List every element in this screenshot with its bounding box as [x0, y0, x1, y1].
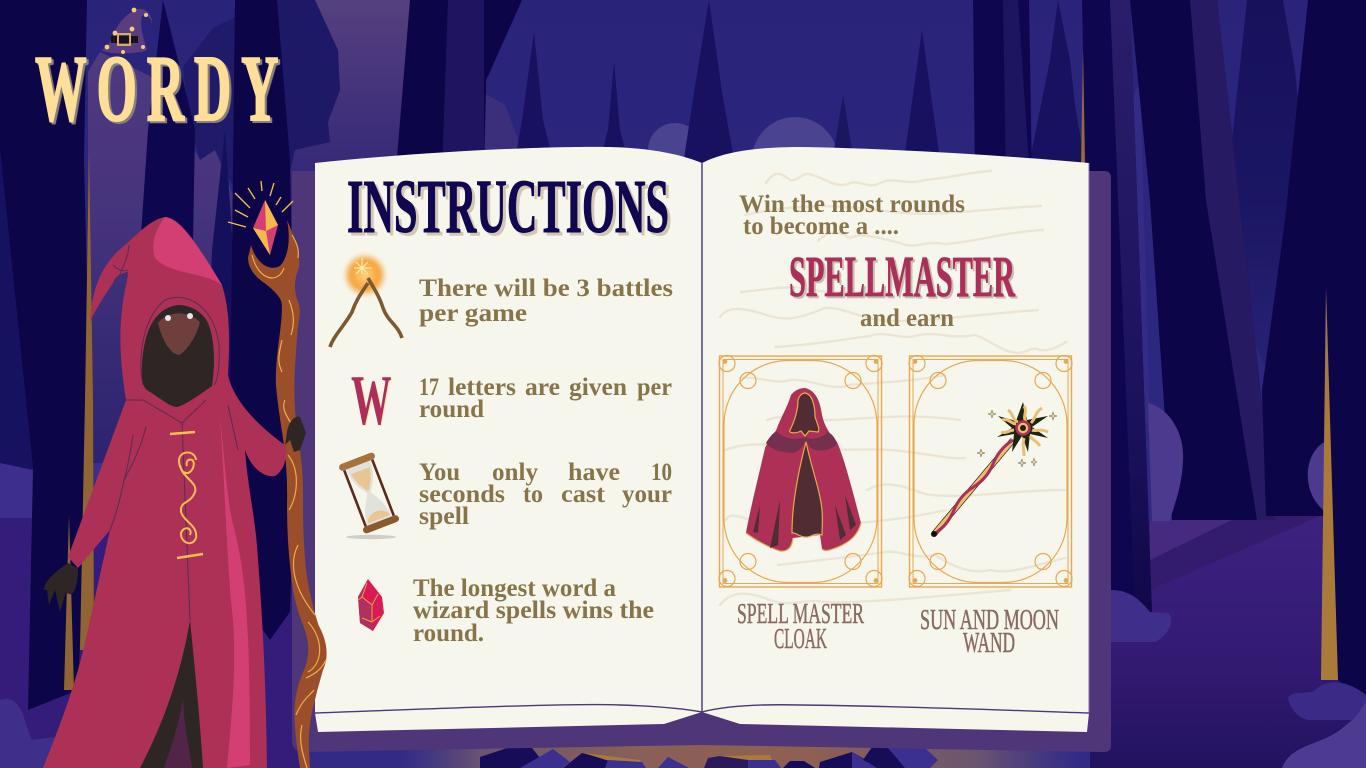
- text: wizard spells wins the: [413, 597, 654, 624]
- text: to: [523, 481, 543, 508]
- text: given: [569, 374, 627, 401]
- gold swirl: [179, 452, 196, 543]
- gem with rays: [228, 181, 293, 255]
- icon: cloak: [746, 388, 861, 551]
- golden spikes: [1321, 287, 1338, 680]
- caption: WAND: [963, 628, 1015, 659]
- panel: instructions: [330, 165, 673, 647]
- wordmark: WORDY: [35, 37, 288, 141]
- heading: INSTRUCTIONS: [347, 165, 669, 249]
- robe seams: [110, 245, 238, 620]
- intro text: to become a ....: [743, 213, 899, 240]
- icon: red gem: [358, 579, 384, 631]
- book cover: [292, 171, 1111, 752]
- item 3: time: [338, 452, 672, 539]
- conifers: [515, 32, 553, 160]
- icon: wand: [931, 402, 1057, 537]
- gold clasps: [170, 432, 203, 558]
- text: spell: [419, 503, 469, 530]
- face opening: [142, 305, 214, 407]
- card: wand: [909, 356, 1072, 659]
- caption: SUN AND MOON: [920, 605, 1059, 636]
- icon: hourglass: [338, 452, 400, 534]
- intro text: Win the most rounds: [739, 191, 965, 218]
- text: letters: [448, 374, 516, 401]
- title: WORDY: [35, 8, 288, 141]
- text: are: [525, 374, 560, 401]
- text: seconds: [419, 481, 505, 508]
- caption: CLOAK: [774, 624, 827, 655]
- heading: spellmaster: SPELLMASTER: [789, 244, 1016, 309]
- robe highlights: [153, 217, 222, 285]
- text: round.: [413, 620, 484, 647]
- text: 17: [419, 374, 439, 401]
- item 2: letters: [351, 363, 672, 440]
- glowing embers: [400, 740, 1080, 768]
- inner robe: [140, 620, 203, 768]
- card: cloak: [719, 356, 882, 655]
- text: have: [568, 459, 620, 486]
- icon: witch hat: [101, 8, 152, 54]
- background scribbles: [720, 171, 1066, 605]
- text: There will be 3 battles: [419, 275, 673, 302]
- face: [158, 313, 200, 355]
- left hand: [44, 563, 78, 612]
- text: 10: [651, 459, 672, 486]
- robe: [43, 217, 286, 768]
- text: per game: [419, 300, 527, 327]
- hand on staff: [285, 417, 306, 452]
- centre trunks: [396, 0, 486, 170]
- icon: crossed wands: [330, 253, 402, 347]
- wizard: [43, 181, 327, 768]
- item 4: winner: [358, 575, 654, 647]
- bushes: [1148, 403, 1183, 521]
- text: round: [419, 396, 484, 423]
- caption: SPELL MASTER: [737, 599, 864, 630]
- hills: [88, 52, 235, 600]
- text: The longest word a: [413, 575, 616, 602]
- text: cast: [561, 481, 606, 508]
- and earn: and earn: [860, 305, 954, 332]
- item 1: battles: [330, 253, 673, 347]
- staff: [248, 220, 327, 768]
- text: your: [622, 481, 672, 508]
- text: You: [419, 459, 460, 486]
- text: only: [492, 459, 538, 486]
- text: per: [637, 374, 672, 401]
- robe stripe: [220, 418, 250, 768]
- panel: rewards: [719, 191, 1072, 659]
- ground: [0, 463, 300, 768]
- open book: [292, 147, 1111, 752]
- right page: [702, 147, 1089, 732]
- left page: [315, 147, 702, 732]
- right trunks: [1130, 0, 1275, 520]
- left trunks: [0, 0, 90, 710]
- icon: letter W: W: [351, 363, 391, 440]
